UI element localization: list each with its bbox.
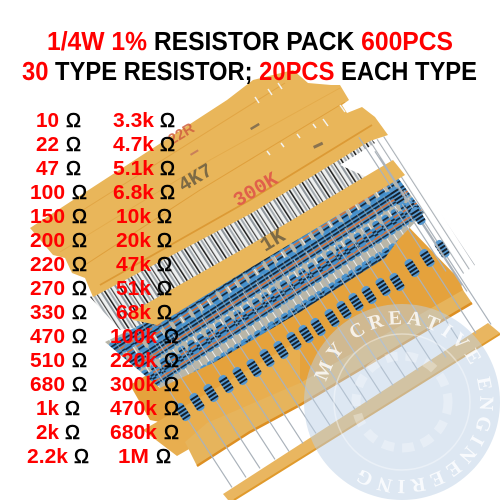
right value column: Ω <box>164 374 179 396</box>
bottom tape lower edge <box>234 334 500 500</box>
gear <box>356 356 448 448</box>
left value column: 510 <box>30 350 65 372</box>
left value column: Ω <box>72 206 87 228</box>
left value column: Ω <box>72 302 87 324</box>
left value column: Ω <box>72 350 87 372</box>
right value column: 3.3k <box>113 110 155 132</box>
left value column: 22 <box>36 134 59 156</box>
second tape lower edge <box>197 303 472 466</box>
right value column: 100k <box>110 326 158 348</box>
printed value 1K: 1K <box>257 225 291 258</box>
right value column: Ω <box>160 182 175 204</box>
right value column: Ω <box>160 158 175 180</box>
left value column: Ω <box>74 446 89 468</box>
watermark overlay <box>304 304 500 500</box>
tape gap with leads <box>255 83 345 155</box>
left value column: Ω <box>72 278 87 300</box>
right value column: 680k <box>110 422 158 444</box>
second dense layer <box>105 178 424 388</box>
left value column: Ω <box>66 134 81 156</box>
right value column: 10k <box>116 206 152 228</box>
right value column: 47k <box>116 254 152 276</box>
left value column: Ω <box>66 158 81 180</box>
left value column: Ω <box>66 110 81 132</box>
left value column: 270 <box>30 278 65 300</box>
right value column: 220k <box>110 350 158 372</box>
right value column <box>110 110 179 468</box>
left value column: 1k <box>36 398 60 420</box>
left value column: 47 <box>36 158 59 180</box>
left value column: Ω <box>65 398 80 420</box>
bottom tape <box>223 323 500 500</box>
printed value 22R: 22R <box>165 120 198 148</box>
watermark ring text: MY CREATIVE ENGINEERING <box>314 310 494 494</box>
left value column: 680 <box>30 374 65 396</box>
right value column: Ω <box>160 110 175 132</box>
left value column <box>27 110 89 468</box>
left value column: Ω <box>65 422 80 444</box>
top tape stack <box>30 70 388 297</box>
tape with 1K label <box>130 160 405 325</box>
right value column: 20k <box>116 230 152 252</box>
right value column: 68k <box>116 302 152 324</box>
right value column: Ω <box>160 134 175 156</box>
left value column: 100 <box>30 182 65 204</box>
left value column: 2k <box>36 422 60 444</box>
left value column: Ω <box>72 374 87 396</box>
right value column: Ω <box>157 278 172 300</box>
title line 2: 30 TYPE RESISTOR; 20PCS EACH TYPE <box>22 58 477 86</box>
right value column: Ω <box>157 254 172 276</box>
row of loose resistors <box>141 135 495 490</box>
dense blue resistor band <box>105 178 424 388</box>
left value column: Ω <box>72 230 87 252</box>
left value column: 200 <box>30 230 65 252</box>
left value column: 2.2k <box>27 446 69 468</box>
right value column: 51k <box>116 278 152 300</box>
right value column: Ω <box>164 422 179 444</box>
right value column: 470k <box>110 398 158 420</box>
left value column: 330 <box>30 302 65 324</box>
second tape <box>185 290 472 466</box>
right value column: Ω <box>156 446 171 468</box>
right value column: Ω <box>164 326 179 348</box>
right value column: 300k <box>110 374 158 396</box>
printed marks on tape <box>190 123 323 156</box>
tape seams <box>60 83 372 285</box>
right value column: Ω <box>157 302 172 324</box>
white resistor zone on the right <box>340 135 465 255</box>
left value column: Ω <box>72 254 87 276</box>
left value column: 10 <box>36 110 59 132</box>
right value column: Ω <box>157 206 172 228</box>
left value column: 470 <box>30 326 65 348</box>
right value column: Ω <box>164 398 179 420</box>
staggered tape ends <box>143 340 300 456</box>
left value column: 220 <box>30 254 65 276</box>
orange backing tape behind resistors <box>130 222 464 450</box>
left value column: 150 <box>30 206 65 228</box>
grey striped resistor band <box>90 138 396 330</box>
right value column: 1M <box>118 446 149 468</box>
right value column: 4.7k <box>113 134 155 156</box>
printed value 300K: 300K <box>230 169 283 213</box>
right value column: Ω <box>164 350 179 372</box>
leads on right <box>370 135 475 280</box>
right value column: 5.1k <box>113 158 155 180</box>
left value column: Ω <box>72 182 87 204</box>
right value column: Ω <box>157 230 172 252</box>
printed value 4K7: 4K7 <box>175 160 217 198</box>
title line 1: 1/4W 1% RESISTOR PACK 600PCS <box>47 28 453 56</box>
right value column: 6.8k <box>113 182 155 204</box>
left value column: Ω <box>72 326 87 348</box>
